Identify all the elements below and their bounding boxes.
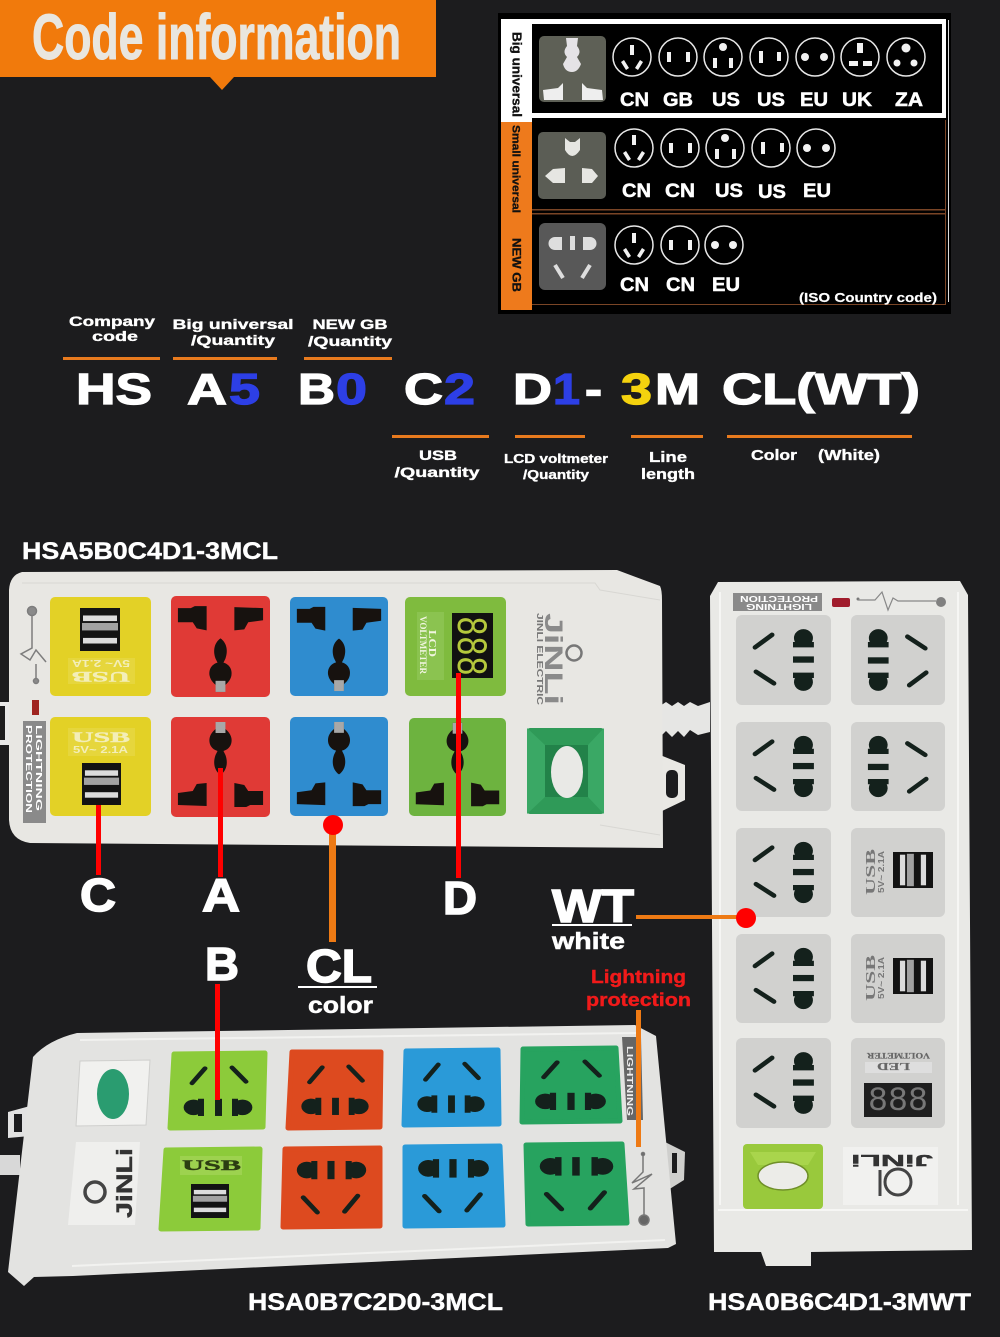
usb socket bottom: 5V~ 2.1A bbox=[73, 745, 128, 756]
label: line length bbox=[631, 435, 703, 483]
country codes: CN bbox=[622, 181, 651, 202]
row: big universal bbox=[501, 19, 946, 122]
country codes: US bbox=[712, 90, 740, 111]
label: company code: Company bbox=[69, 314, 156, 329]
socket holes bbox=[755, 629, 926, 1114]
plug icons bbox=[613, 38, 925, 264]
country codes: GB bbox=[663, 90, 693, 111]
socket green dark bottom bbox=[526, 1144, 627, 1224]
label: usb quantity: /Quantity bbox=[394, 464, 480, 480]
label: big universal quantity: /Quantity bbox=[191, 333, 276, 348]
cable and hooks bbox=[0, 702, 710, 812]
lcd voltmeter bbox=[405, 597, 506, 696]
lightning label: PROTECTION bbox=[740, 594, 818, 603]
code string: C bbox=[404, 365, 443, 414]
lightning symbol bbox=[632, 1152, 652, 1225]
code string: - bbox=[585, 365, 602, 414]
model name: strip three: HSA0B6C4D1-3MWT bbox=[708, 1289, 971, 1316]
gray sockets bbox=[736, 615, 945, 1128]
country codes: ZA bbox=[895, 90, 923, 111]
lcd voltmeter: VOLTMETER bbox=[417, 616, 427, 674]
led voltmeter: VOLTMETER bbox=[867, 1051, 930, 1060]
power strip: colored gb bottom bbox=[0, 1025, 685, 1286]
code legend upper labels bbox=[63, 314, 393, 360]
usb socket bottom: USB bbox=[72, 730, 130, 746]
lightning label bbox=[733, 592, 946, 611]
callout: cl color bbox=[298, 940, 377, 1018]
led voltmeter bbox=[864, 1051, 932, 1121]
code legend lower labels bbox=[392, 435, 912, 483]
code string: 2 bbox=[444, 365, 475, 414]
country codes: CN bbox=[620, 90, 649, 111]
label: new gb quantity: /Quantity bbox=[308, 334, 393, 349]
row: big universal: Big universal bbox=[510, 32, 524, 117]
usb sockets: 5V~ 2.1A bbox=[877, 851, 886, 893]
country codes: US bbox=[757, 90, 785, 111]
label: usb quantity bbox=[392, 435, 489, 480]
code string: B bbox=[298, 365, 335, 414]
callout: c: C bbox=[80, 869, 116, 921]
code string bbox=[76, 365, 920, 414]
code string: A bbox=[187, 365, 227, 414]
usb sockets: USB bbox=[864, 955, 879, 1001]
universal sockets red bbox=[171, 596, 270, 817]
strip body bbox=[8, 1025, 676, 1286]
country codes: EU bbox=[800, 90, 828, 111]
code string: 5 bbox=[229, 365, 260, 414]
callout: wt white: white bbox=[551, 928, 625, 954]
socket blue bottom bbox=[405, 1146, 503, 1226]
callout: cl color: color bbox=[308, 992, 373, 1018]
country codes bbox=[620, 90, 923, 296]
label: line length: Line bbox=[649, 449, 687, 466]
code string: 1 bbox=[553, 365, 580, 414]
power strip: colored universal top bbox=[0, 570, 710, 848]
label: color white bbox=[727, 435, 912, 464]
callout: a: A bbox=[202, 869, 240, 921]
country codes: CN bbox=[665, 181, 695, 202]
label: usb quantity: USB bbox=[419, 447, 457, 463]
country codes: US bbox=[758, 182, 786, 203]
country codes: UK bbox=[842, 90, 872, 111]
lightning protection label: LIGHTNING bbox=[34, 725, 44, 812]
brand logo bbox=[535, 613, 582, 705]
model name: strip two: HSA0B7C2D0-3MCL bbox=[248, 1289, 503, 1316]
socket green top bbox=[170, 1053, 265, 1128]
lightning protection label: PROTECTION bbox=[24, 725, 34, 813]
strip body bbox=[9, 570, 663, 848]
power switch bbox=[76, 1060, 150, 1126]
connector: wt bbox=[636, 908, 756, 928]
universal socket green bbox=[409, 718, 506, 816]
label: big universal quantity: Big universal bbox=[172, 317, 294, 332]
lightning label: LIGHTNING bbox=[625, 1046, 634, 1116]
lcd voltmeter: LCD bbox=[426, 630, 437, 658]
row: new gb: NEW GB bbox=[510, 238, 524, 292]
row: small universal: Small universal bbox=[510, 125, 522, 213]
connector: lightning bbox=[636, 1010, 641, 1147]
led voltmeter: LED bbox=[877, 1060, 910, 1072]
label: company code: code bbox=[92, 329, 139, 344]
country codes: CN bbox=[620, 275, 649, 296]
country codes: CN bbox=[666, 275, 695, 296]
led voltmeter: 888 bbox=[868, 1083, 928, 1121]
brand logo: JiNLi bbox=[539, 613, 567, 705]
lightning protection label bbox=[23, 721, 46, 823]
socket orange top bbox=[288, 1052, 381, 1128]
lightning label: LIGHTNING bbox=[746, 602, 812, 611]
callout: d: D bbox=[443, 872, 477, 924]
cable and hooks bbox=[0, 1106, 685, 1190]
connector: c bbox=[96, 805, 101, 875]
callout: wt white bbox=[551, 880, 634, 954]
lightning label bbox=[622, 1037, 643, 1120]
country codes: US bbox=[715, 181, 743, 202]
label: new gb quantity bbox=[304, 317, 393, 360]
code string: 3 bbox=[621, 365, 652, 414]
callout: wt white: WT bbox=[552, 880, 634, 932]
brand logo: JiNLi bbox=[112, 1148, 137, 1218]
power switch bbox=[743, 1144, 823, 1209]
lightning symbol bbox=[21, 606, 46, 684]
usb sockets: USB bbox=[864, 849, 879, 895]
usb socket bottom bbox=[50, 717, 151, 816]
connector: cl bbox=[323, 815, 343, 942]
indicator led bbox=[32, 700, 39, 715]
universal sockets blue bbox=[290, 597, 388, 816]
usb sockets bbox=[864, 849, 933, 1001]
label: color white: Color bbox=[751, 447, 797, 464]
title banner bbox=[0, 0, 436, 90]
callout: cl color: CL bbox=[306, 940, 372, 992]
socket orange bottom bbox=[283, 1148, 380, 1227]
code string: D bbox=[513, 365, 552, 414]
strip body bbox=[710, 581, 972, 1266]
label: line length: length bbox=[641, 466, 695, 483]
label: lcd voltmeter quantity bbox=[504, 435, 608, 482]
power strip: white vertical right bbox=[710, 581, 972, 1266]
label: big universal quantity bbox=[172, 317, 294, 360]
label: lcd voltmeter quantity: /Quantity bbox=[523, 467, 590, 482]
title banner: Code information bbox=[32, 1, 401, 73]
code string: HS bbox=[76, 365, 152, 414]
socket usb green: USB bbox=[182, 1158, 241, 1174]
power switch bbox=[527, 728, 604, 814]
label: lcd voltmeter quantity: LCD voltmeter bbox=[504, 451, 608, 466]
socket usb green bbox=[161, 1149, 260, 1229]
plug pins bbox=[621, 43, 918, 258]
connector: b bbox=[215, 984, 220, 1100]
connector: d bbox=[456, 673, 461, 878]
usb socket top bbox=[50, 597, 151, 696]
lcd voltmeter: 888 bbox=[444, 616, 494, 676]
usb socket top: USB bbox=[72, 668, 130, 684]
callout: lightning protection: Lightning bbox=[591, 967, 686, 987]
iso note: (ISO Country code) bbox=[799, 291, 937, 305]
usb socket top: 5V~ 2.1A bbox=[72, 657, 130, 668]
brand logo bbox=[68, 1142, 140, 1225]
code string: M bbox=[655, 365, 700, 414]
panel: plug type table bbox=[498, 13, 951, 314]
callout: lightning protection bbox=[586, 967, 691, 1010]
callout: b: B bbox=[205, 938, 239, 990]
socket blue top bbox=[404, 1050, 499, 1125]
model name: strip one: HSA5B0C4D1-3MCL bbox=[22, 538, 278, 565]
code string: 0 bbox=[336, 365, 367, 414]
label: company code bbox=[63, 314, 160, 360]
code string: CL(WT) bbox=[722, 365, 920, 414]
brand logo bbox=[843, 1147, 938, 1205]
usb sockets: 5V~ 2.1A bbox=[877, 957, 886, 999]
country codes: EU bbox=[803, 181, 831, 202]
socket green dark top bbox=[522, 1048, 620, 1122]
label: new gb quantity: NEW GB bbox=[312, 317, 388, 332]
brand logo: JINLI ELECTRIC bbox=[535, 613, 545, 705]
country codes: EU bbox=[712, 275, 740, 296]
label: color white: (White) bbox=[818, 447, 880, 464]
brand logo: JiNLi bbox=[851, 1151, 933, 1168]
row: new gb bbox=[501, 214, 606, 310]
row: small universal bbox=[501, 122, 606, 214]
callout: lightning protection: protection bbox=[586, 990, 691, 1010]
connector: a bbox=[218, 768, 223, 877]
